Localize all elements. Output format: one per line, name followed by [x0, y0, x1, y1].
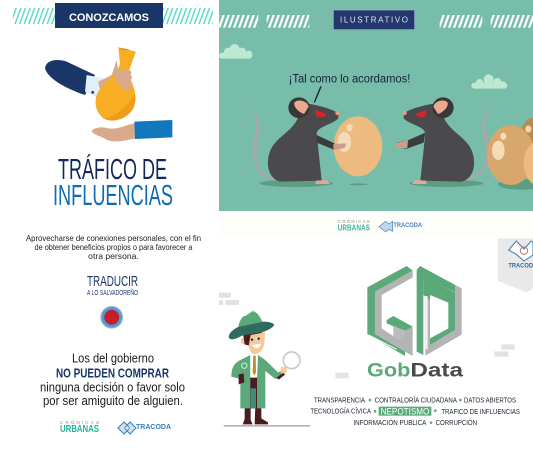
traducir heading	[87, 273, 138, 297]
header stripes	[13, 8, 213, 24]
definition text: de obtener beneficios propios o para favorecer a	[34, 242, 193, 252]
header badge: ILUSTRATIVO	[340, 16, 408, 25]
logo text: Gob	[367, 361, 411, 382]
tag cloud: CONTRALORÍA CIUDADANA	[375, 395, 458, 404]
main message: por ser amiguito de alguien.	[43, 394, 183, 408]
egg	[317, 116, 382, 176]
logo text: Data	[410, 361, 463, 382]
main message	[40, 352, 185, 408]
icon: hands exchanging money bag	[45, 47, 172, 141]
logo: cronicas urbanas: CRÓNICAS	[60, 419, 99, 425]
white stripes	[219, 15, 533, 28]
icon: red dot	[100, 306, 123, 329]
definition text: otra persona.	[88, 251, 139, 261]
logos of the illustration panel: CRÓNICAS	[338, 219, 370, 224]
title: INFLUENCIAS	[53, 180, 173, 212]
header badge: CONOZCAMOS	[69, 12, 149, 24]
tag cloud: DATOS ABIERTOS	[464, 395, 516, 404]
tag cloud	[310, 395, 520, 427]
clouds	[219, 44, 507, 89]
tag cloud: TRANSPARENCIA	[314, 395, 366, 404]
title	[53, 153, 173, 212]
logo: tracoda	[118, 422, 171, 434]
speech text	[289, 73, 410, 102]
decorative gray blocks	[219, 293, 515, 378]
main message: ninguna decisión o favor solo	[40, 380, 185, 394]
title: TRÁFICO DE	[58, 153, 167, 186]
tag cloud: TECNOLOGÍA CÍVICA	[310, 407, 372, 416]
tag cloud: INFORMACIÓN PUBLICA	[353, 418, 427, 427]
speech text: ¡Tal como lo acordamos!	[289, 73, 410, 86]
logos of the illustration panel: TRACODA	[393, 223, 423, 229]
logos of the illustration panel: URBANAS	[338, 222, 370, 232]
panel: ilustrativo	[219, 0, 533, 238]
logo: tracoda: TRACODA	[136, 424, 171, 431]
main message: NO PUEDEN COMPRAR	[56, 366, 169, 380]
definition text: Aprovecharse de conexiones personales, con el fin	[26, 233, 201, 243]
logos of the illustration panel	[338, 219, 423, 232]
main message: Los del gobierno	[72, 352, 154, 366]
panel: gobdata	[219, 238, 533, 378]
logo: GD mark	[367, 266, 462, 356]
right rat	[395, 97, 492, 184]
logo: cronicas urbanas: URBANAS	[60, 424, 99, 435]
logo text	[367, 361, 463, 382]
corner tracoda badge	[498, 238, 533, 292]
traducir heading: A LO SALVADOREÑO	[87, 288, 138, 297]
definition text	[26, 233, 201, 261]
background eggs	[487, 118, 533, 185]
ground shadows	[260, 179, 533, 190]
tag cloud: CORRUPCIÓN	[436, 418, 477, 427]
tag cloud: NEPOTISMO	[381, 406, 429, 416]
header badge	[333, 10, 415, 30]
header badge	[55, 3, 163, 28]
left rat	[250, 97, 339, 184]
logo: cronicas urbanas	[60, 419, 99, 435]
traducir heading: TRADUCIR	[87, 273, 138, 290]
detective character	[224, 311, 310, 427]
panel: conozcamos	[0, 0, 217, 454]
